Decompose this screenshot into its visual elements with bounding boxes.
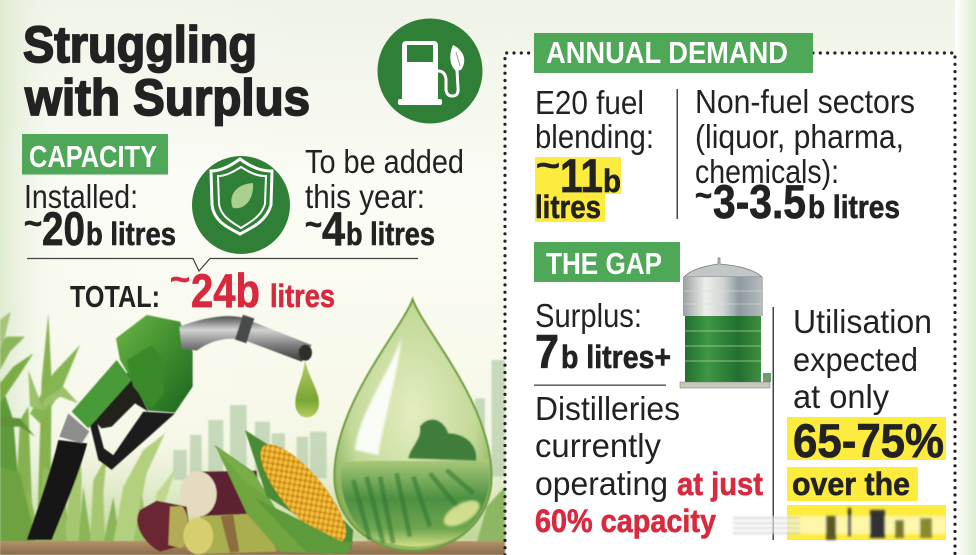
text: distilleries: at just — [677, 466, 763, 502]
text: distilleries: currently — [535, 427, 661, 464]
large green drop — [334, 299, 492, 551]
text: E20 fuel blending: 11 — [560, 149, 603, 202]
text: utilisation — [787, 303, 946, 540]
dotted frame — [505, 53, 955, 555]
text: surplus: 7 — [535, 325, 559, 378]
text: E20 fuel blending: ~ — [536, 147, 560, 183]
small drop — [295, 360, 319, 417]
corn with husk — [213, 430, 359, 554]
column divider — [772, 307, 774, 540]
text: to be added this year: To be added — [305, 143, 464, 180]
text: distilleries — [535, 390, 763, 539]
text: installed capacity — [24, 178, 176, 255]
icon: storage tank — [680, 258, 771, 388]
title: Struggling — [23, 16, 257, 73]
text: total capacity: litres — [270, 278, 335, 314]
reflection: crop rows — [353, 470, 473, 543]
callout line to total — [27, 258, 418, 271]
text: utilisation: 65-75% — [793, 414, 944, 467]
sugarcane plants — [0, 312, 505, 543]
sugarcane pieces — [137, 471, 277, 554]
text: total capacity: TOTAL: — [70, 279, 160, 314]
collar — [59, 413, 89, 443]
reflection: field — [341, 460, 490, 546]
left edge tint — [0, 0, 300, 555]
text: total capacity — [70, 261, 335, 317]
text: E20 fuel blending: b — [603, 163, 621, 199]
text: surplus — [535, 297, 671, 378]
text: non-fuel sectors: 3-3.5 — [713, 175, 806, 228]
spout — [179, 316, 312, 362]
label: capacity: CAPACITY — [29, 139, 157, 174]
text: to be added this year: b litres — [346, 216, 435, 252]
text: utilisation: Utilisation — [793, 303, 932, 340]
text: E20 fuel blending: litres — [535, 189, 601, 225]
reflection: tree — [408, 420, 476, 461]
horizon haze — [0, 440, 505, 541]
text: E20 fuel blending: E20 fuel — [535, 84, 644, 121]
fuel nozzle and hose — [27, 315, 319, 540]
text: installed capacity: b litres — [86, 216, 176, 252]
heading: annual demand: ANNUAL DEMAND — [546, 35, 788, 70]
text: distilleries: Distilleries — [535, 390, 680, 427]
text: installed capacity: Installed: — [24, 178, 138, 215]
text: total capacity: ~ — [170, 261, 190, 297]
text: E20 fuel blending: blending: — [535, 118, 654, 155]
text: installed capacity: 20 — [42, 202, 85, 255]
text: non-fuel sectors — [695, 83, 915, 228]
text: utilisation: at only — [793, 378, 889, 415]
illustration: biofuel scene — [0, 299, 505, 555]
text: surplus: b litres+ — [561, 339, 671, 375]
highlight — [355, 337, 402, 455]
text: to be added this year: 4 — [322, 202, 345, 255]
icon: fuel pump with leaf — [378, 18, 482, 124]
text: distilleries: 60% capacity — [535, 503, 716, 539]
hose — [27, 440, 87, 540]
text: total capacity: 24b — [191, 264, 260, 317]
text: installed capacity: ~ — [24, 205, 42, 241]
title: with Surplus — [24, 69, 310, 126]
text: non-fuel sectors: b litres — [808, 189, 900, 225]
column divider — [676, 89, 678, 219]
panel: right white background — [506, 53, 955, 555]
text: E20 fuel blending — [535, 84, 654, 225]
skyline — [173, 360, 505, 480]
trigger guard — [87, 412, 175, 470]
watermark smear — [733, 508, 946, 540]
text: utilisation: over the — [792, 466, 910, 502]
lower glow — [440, 495, 484, 531]
text: to be added this year — [305, 143, 464, 255]
icon: shield with leaf — [192, 156, 290, 254]
text: non-fuel sectors: Non-fuel sectors — [695, 83, 915, 120]
text: to be added this year: this year: — [305, 178, 425, 215]
body — [116, 315, 193, 413]
text: utilisation: expected — [793, 341, 918, 378]
table — [0, 541, 505, 555]
text: surplus: Surplus: — [535, 297, 642, 334]
text: distilleries: operating — [535, 465, 668, 502]
text: to be added this year: ~ — [305, 206, 322, 242]
text: non-fuel sectors: (liquor, pharma, — [695, 118, 904, 155]
text: non-fuel sectors: ~ — [695, 177, 712, 213]
divider — [534, 384, 666, 386]
text: non-fuel sectors: chemicals): — [695, 153, 839, 190]
title — [23, 16, 310, 126]
heading: the gap: THE GAP — [546, 246, 662, 281]
handle — [72, 360, 132, 428]
right edge tint — [955, 0, 976, 555]
